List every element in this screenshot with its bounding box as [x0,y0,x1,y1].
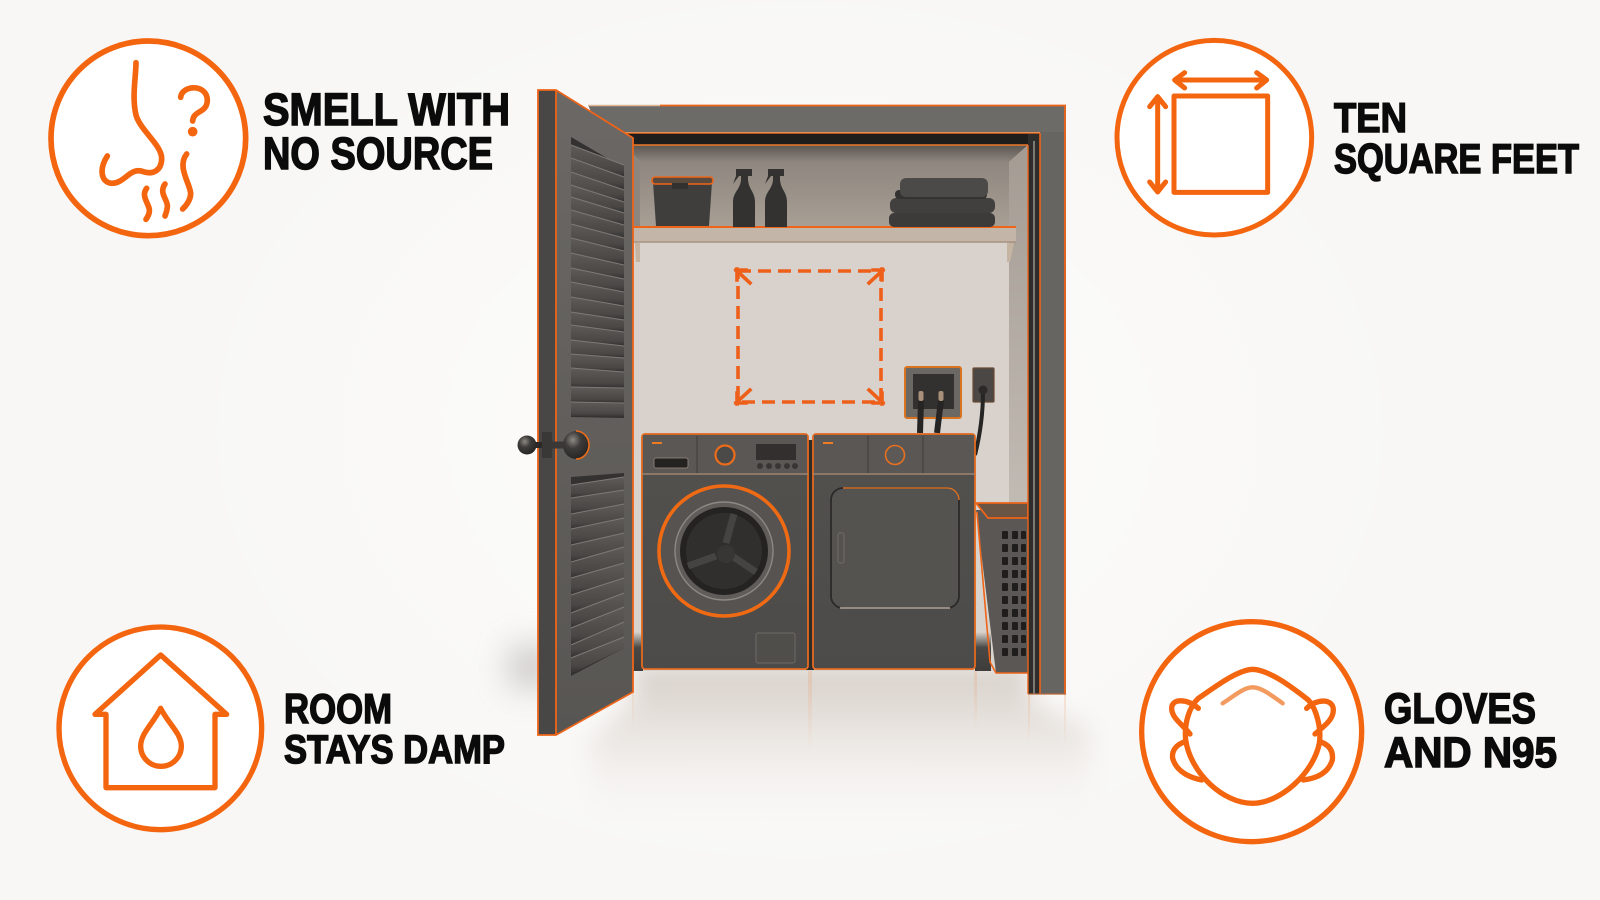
door knobs [518,431,589,459]
laundry hamper [976,503,1028,673]
washer body [642,434,808,669]
dryer control panel [813,435,975,474]
icon: nose with question mark [51,41,246,236]
icon: house with water drop [59,627,262,830]
dryer [813,434,975,669]
label [1334,94,1579,182]
label [263,84,510,179]
closet interior [625,145,1028,672]
door face [556,90,633,735]
spray bottles [733,169,787,227]
label [1384,685,1557,777]
label: AND N95 [1384,729,1557,777]
storage bin [652,177,713,226]
icon: square with dimension arrows [1117,40,1312,235]
label: STAYS DAMP [284,728,505,772]
callout: smell with no source [51,41,510,236]
open louvered door [518,90,633,735]
lower louver [571,473,624,676]
closet door frame [588,105,1066,694]
label: GLOVES [1384,685,1536,733]
label: NO SOURCE [263,128,493,179]
label: TEN [1334,94,1407,141]
dashed ten square feet marker [736,269,883,404]
icon: N95 mask [1142,622,1362,842]
label: ROOM [284,685,392,732]
floor shadow [512,650,1090,830]
dryer door [831,488,959,608]
folded towels [889,178,995,227]
label: SMELL WITH [263,84,510,135]
water hookup box [905,367,961,433]
washer control panel [642,435,808,474]
dryer body [813,434,975,669]
callout: gloves and N95 [1142,622,1557,842]
washer door [659,486,789,616]
label [284,685,505,772]
callout: room stays damp [59,627,505,830]
filter hatch [756,633,795,663]
door edge [538,90,556,735]
wall outlet and cord [973,368,994,455]
upper louver [571,137,624,418]
washer [642,434,814,670]
closet illustration [518,90,1066,735]
shelf [633,227,1016,262]
door outline [538,90,633,735]
callout: ten square feet [1117,40,1579,235]
